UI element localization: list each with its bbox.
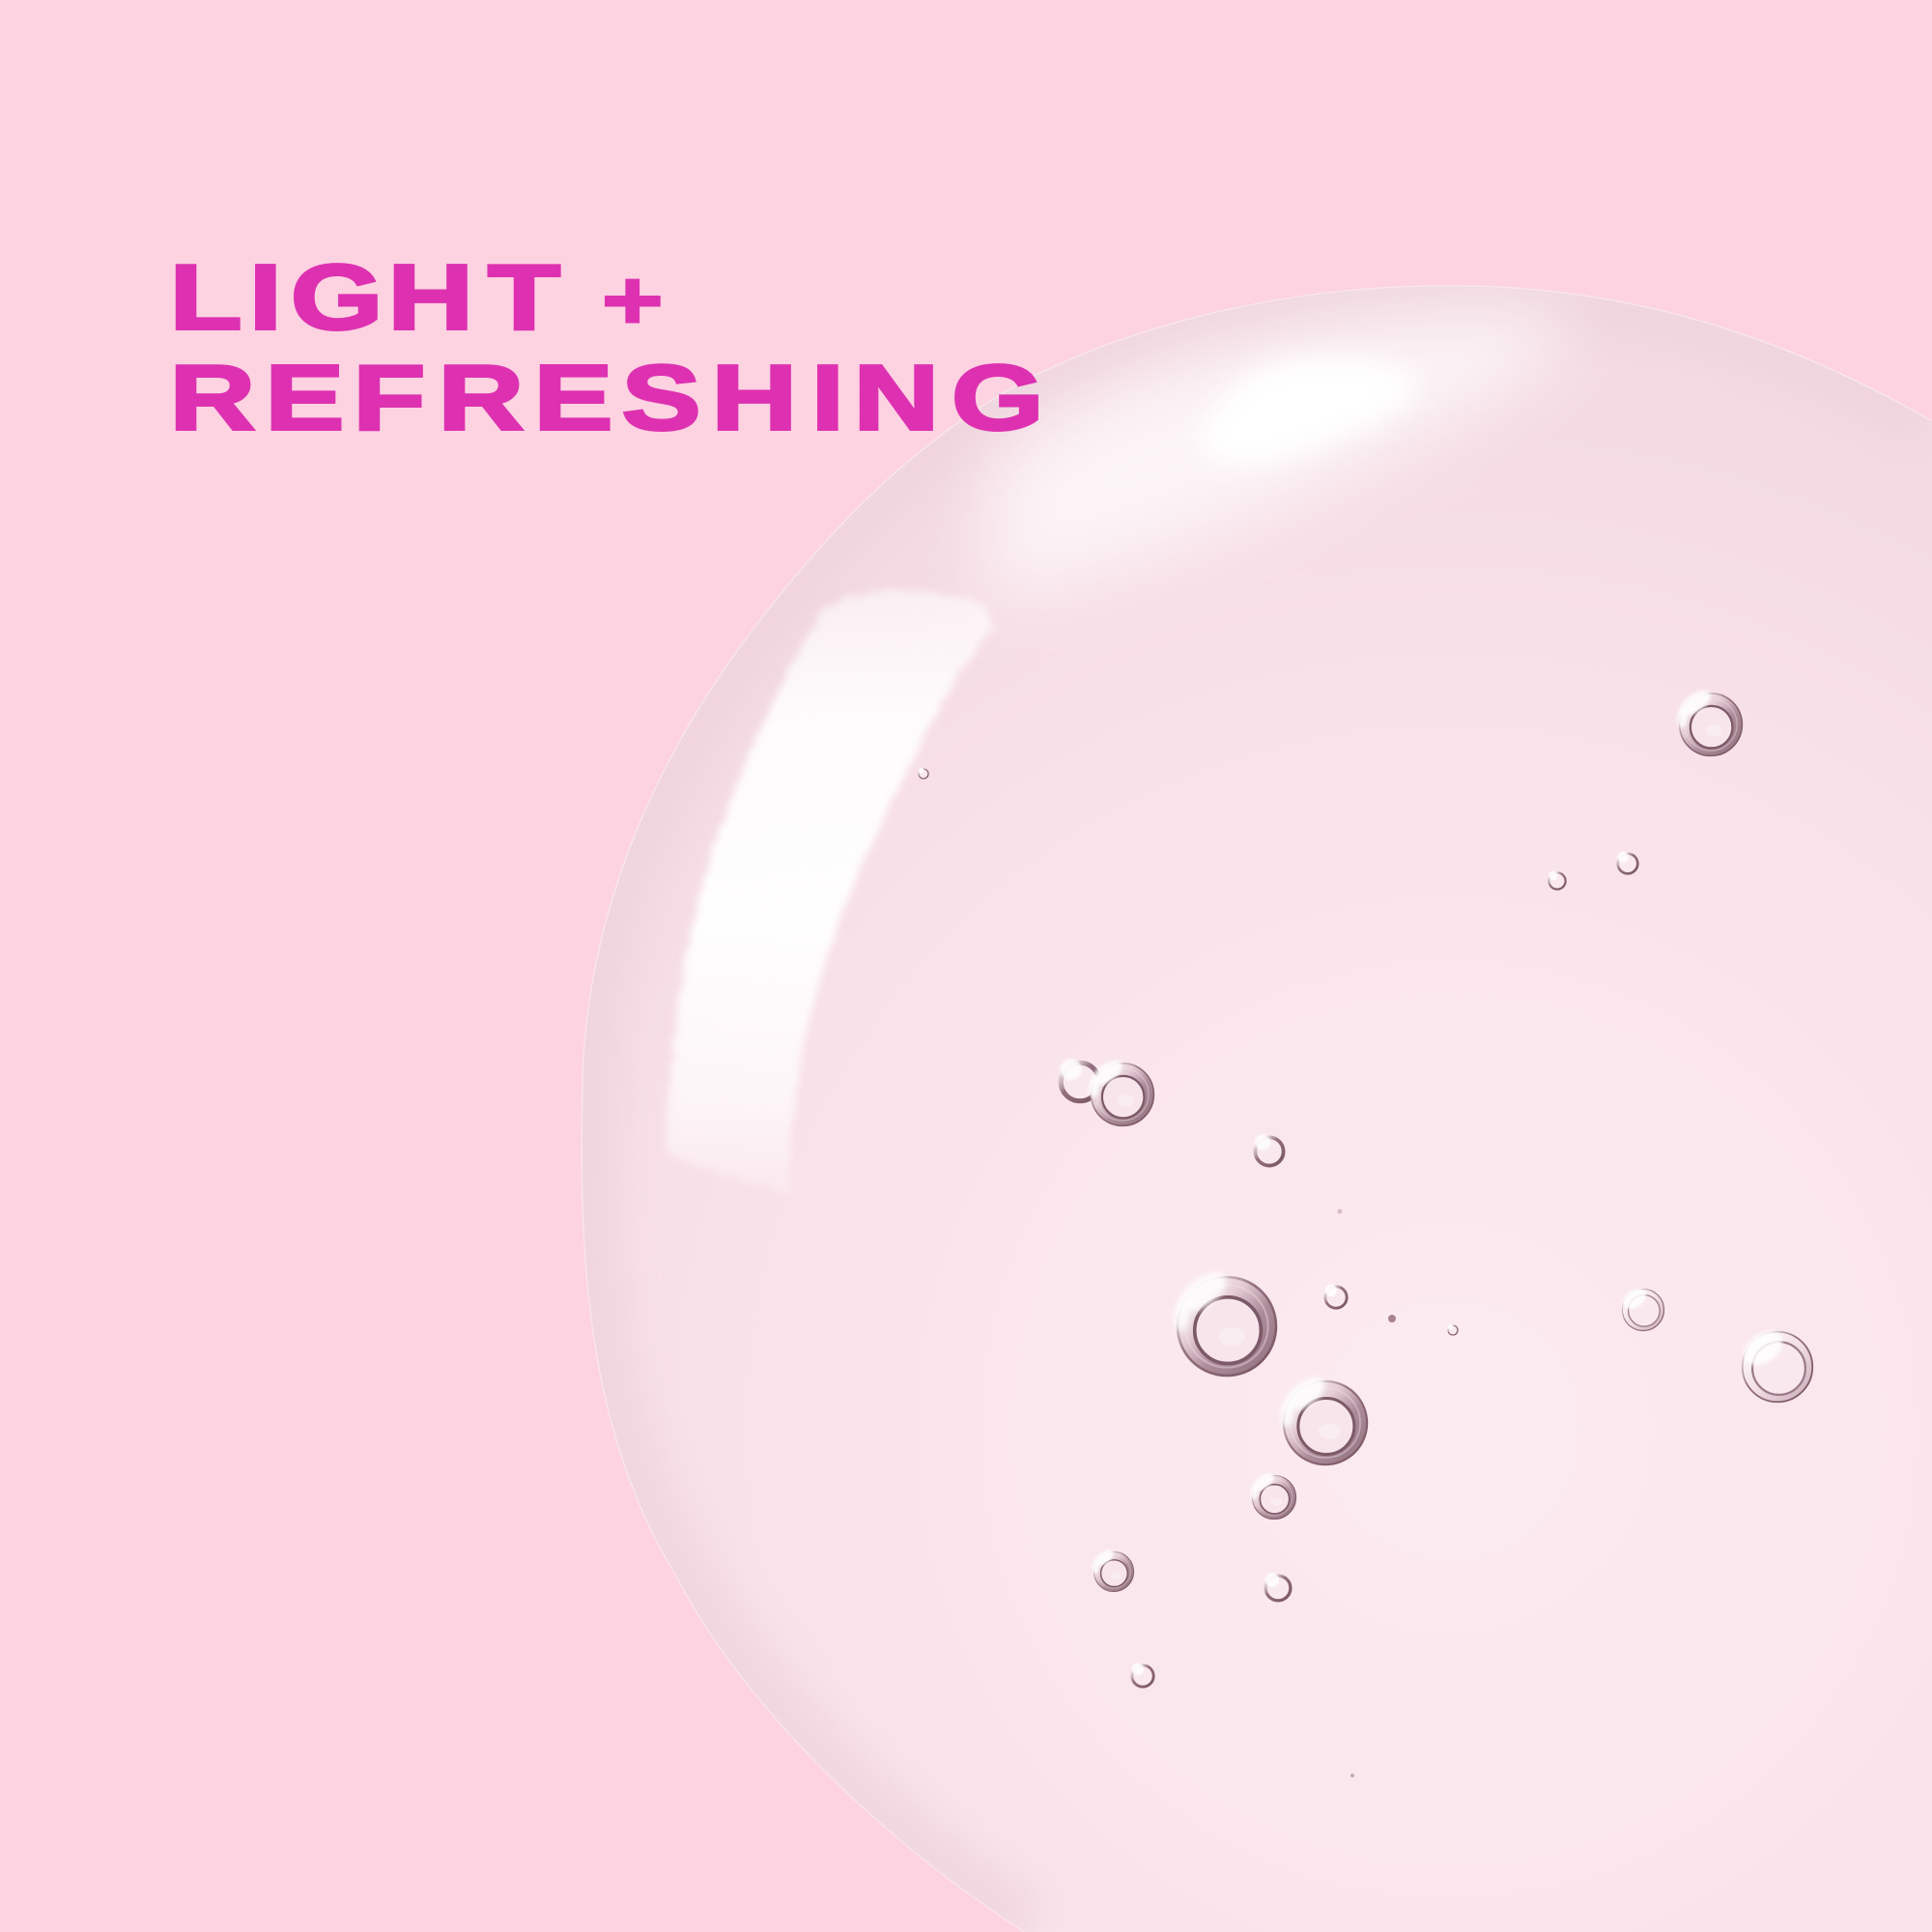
highlight: left streak (668, 591, 993, 1194)
bubble: lower small (1264, 1573, 1292, 1602)
title line 1: + (602, 254, 664, 347)
bubble: lower left (1092, 1547, 1134, 1592)
infographic canvas (176, 263, 1932, 1932)
title (169, 245, 1044, 449)
bubble: right medium (1619, 1285, 1664, 1331)
bubble: upper right (1676, 686, 1742, 755)
bubble: upper right tiny (1548, 871, 1566, 890)
bubble: mid small (1254, 1134, 1285, 1167)
bubble: speck bottom (1350, 1774, 1354, 1777)
bubble: pair, back (1059, 1059, 1101, 1103)
bubble: pair, front (1088, 1056, 1153, 1125)
title line 2: REFRESHING (169, 346, 1044, 449)
bubble: right large (1738, 1324, 1812, 1402)
bubble: large lower (1279, 1371, 1367, 1464)
bubble: upper right small (1617, 852, 1638, 874)
bubble: speck centre (1388, 1315, 1396, 1322)
bubble: bottom small (1131, 1662, 1154, 1688)
bubble: tiny right of centre (1448, 1324, 1458, 1335)
bubble: large centre (1173, 1265, 1276, 1376)
bubble: speck upper (1337, 1209, 1343, 1213)
bubble: tiny near streak (919, 768, 928, 779)
bubble: lower centre (1250, 1470, 1296, 1520)
highlight: top sheen (1198, 358, 1420, 465)
gel droplet (581, 285, 1932, 1932)
bubble: centre small (1324, 1284, 1348, 1309)
title line 1: LIGHT (169, 245, 560, 349)
